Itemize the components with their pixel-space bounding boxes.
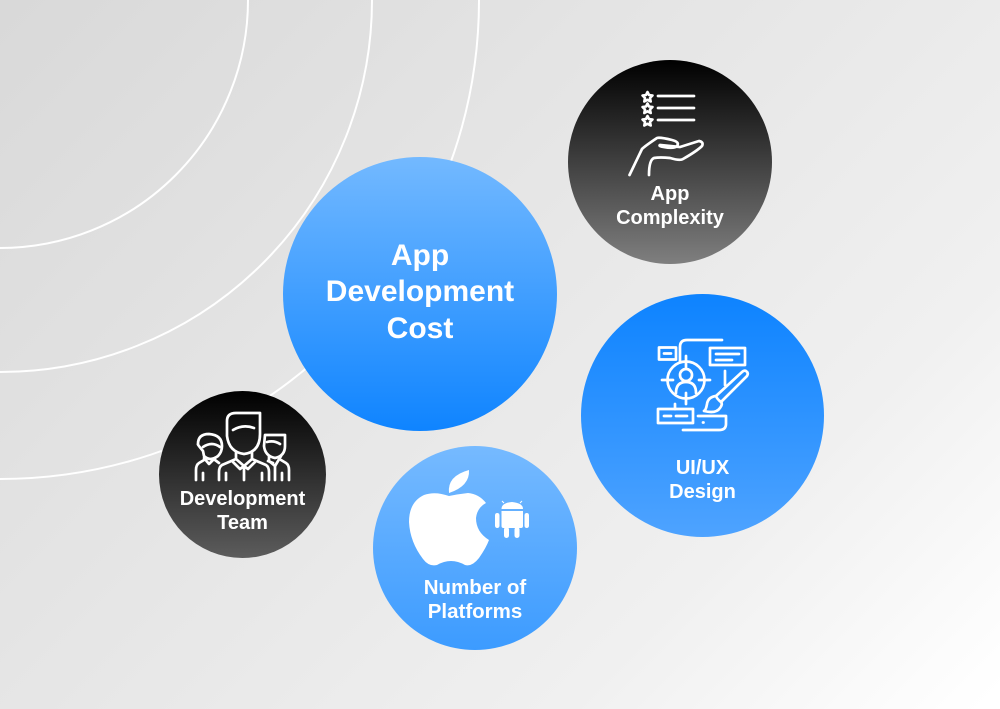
- label: Development: [180, 488, 306, 510]
- label: Number of: [424, 576, 526, 599]
- label: Complexity: [616, 207, 725, 229]
- central heading: Cost: [387, 312, 453, 345]
- label: Platforms: [428, 600, 522, 623]
- label: Design: [669, 481, 736, 503]
- icon: target user, brush and wireframes: [658, 340, 748, 430]
- icon: android logo: [495, 501, 529, 538]
- central heading: Development: [326, 275, 514, 308]
- icon: apple logo: [409, 470, 489, 565]
- icon: star list and open hand: [630, 92, 703, 175]
- icon: three team members: [196, 413, 289, 480]
- circle: Number of Platforms: [373, 446, 577, 650]
- concentric arcs: [0, 0, 479, 479]
- label: App: [651, 183, 689, 205]
- circle: UI/UX Design: [581, 294, 824, 537]
- label: Team: [217, 512, 268, 534]
- circle: Development Team: [159, 391, 326, 558]
- circle: App Development Cost: [283, 157, 557, 431]
- central heading: App: [391, 239, 449, 272]
- circle: App Complexity: [568, 60, 772, 264]
- label: UI/UX: [676, 457, 730, 479]
